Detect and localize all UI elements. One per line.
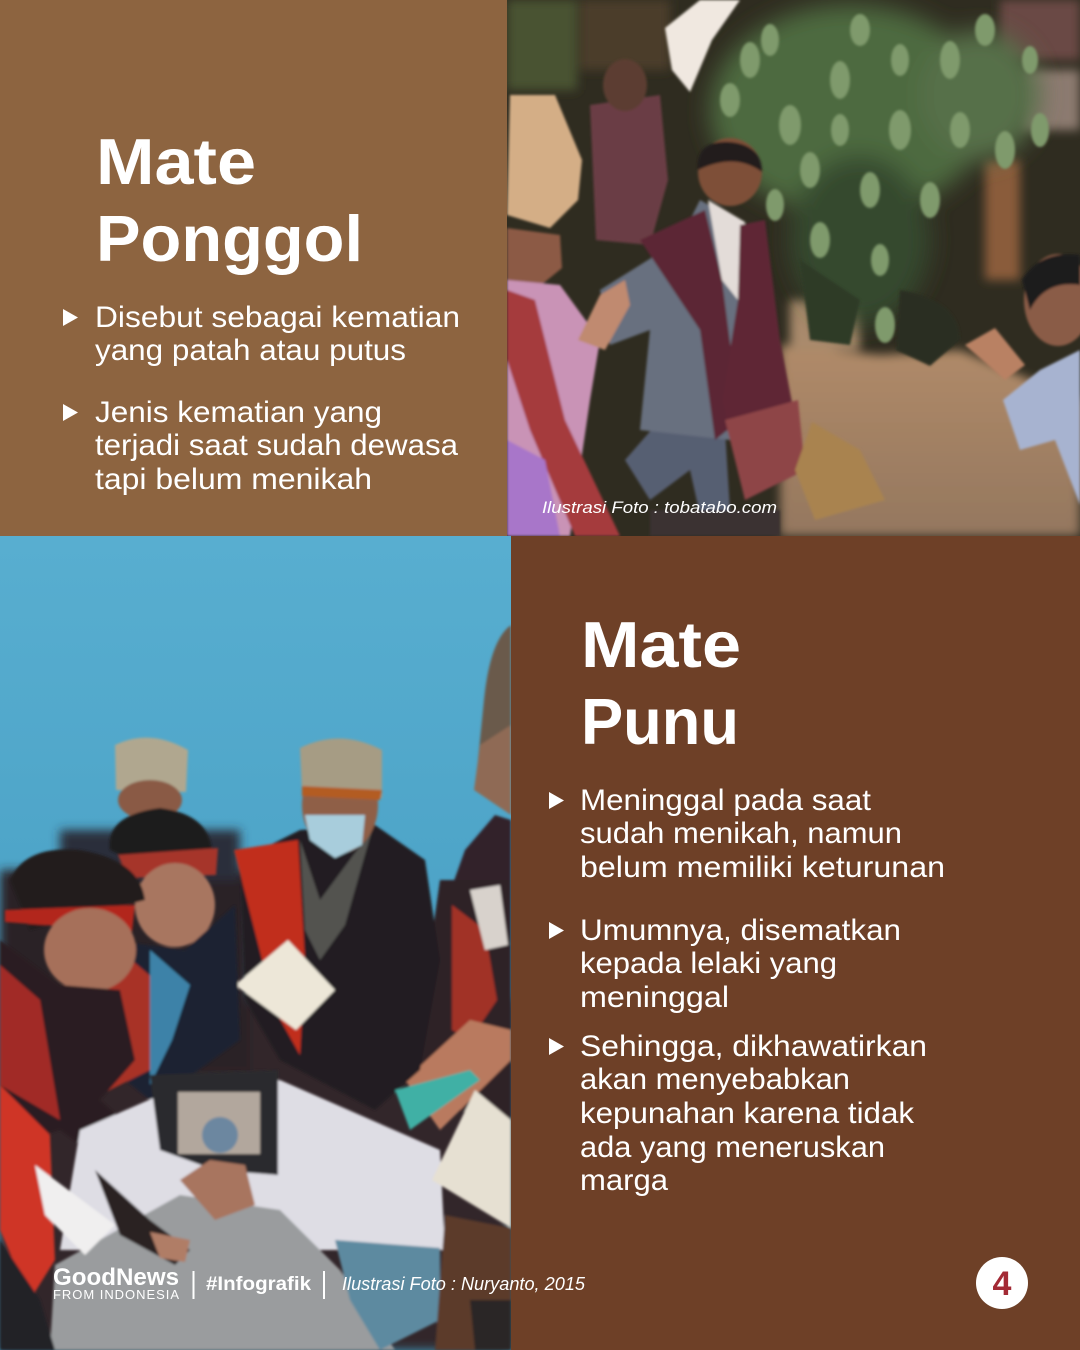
text block: Ponggol point 2: terjadi saat sudah dewasa (95, 429, 458, 462)
text block: Ponggol point 1: Disebut sebagai kematian (95, 301, 460, 334)
deceased grey ulos (50, 1195, 395, 1350)
edge figure (478, 625, 511, 810)
page number badge (976, 1257, 1028, 1309)
women (110, 808, 212, 860)
text block: Punu point 3: akan menyebabkan (580, 1063, 850, 1096)
photo credit: tobatabo: Ilustrasi Foto : tobatabo.com (542, 498, 777, 517)
text block: Ponggol point 2: Jenis kematian yang (95, 396, 382, 429)
heading: Mate Punu: Mate (581, 608, 741, 681)
foliage (710, 5, 1040, 325)
text block: Ponggol point 2 (63, 396, 458, 496)
footer: hashtag Infografik with dividers: #Infografik (206, 1274, 311, 1295)
text block: Ponggol point 1: yang patah atau putus (95, 334, 406, 367)
batik man background (590, 95, 668, 245)
heading: Mate Punu (581, 608, 741, 758)
photo: mourners around a coffin against blue wall (0, 536, 511, 1350)
man's legs and suit (624, 430, 732, 512)
text block: Punu point 1: Meninggal pada saat (580, 784, 872, 817)
back man (115, 738, 188, 792)
dark bush base (896, 290, 960, 366)
mat (795, 422, 885, 520)
text block: Ponggol point 1 (63, 301, 460, 367)
photo: Batak ceremony with man in grey suit and ulos (507, 0, 1080, 536)
heading: Mate Ponggol: Mate (96, 125, 256, 198)
man's head (698, 138, 762, 206)
panel: Mate Ponggol background (0, 0, 507, 536)
dark suited man (240, 825, 440, 1110)
footer: hashtag Infografik with dividers (192, 1271, 325, 1299)
photo credit: Nuryanto: Ilustrasi Foto : Nuryanto, 2015 (342, 1274, 586, 1294)
heading: Mate Ponggol (96, 125, 363, 275)
booklet (235, 940, 335, 1030)
text block: Punu point 2: Umumnya, disematkan (580, 914, 901, 947)
red ulos left (0, 1085, 55, 1300)
text block: Punu point 3: kepunahan karena tidak (580, 1097, 915, 1130)
woman (507, 228, 562, 286)
text block: Punu point 3 (549, 1030, 927, 1197)
white shirt (708, 200, 745, 300)
heading: Mate Punu: Punu (581, 685, 739, 758)
right man (1024, 254, 1080, 346)
footer: GoodNews logo: FROM INDONESIA (53, 1287, 179, 1302)
heading: Mate Ponggol: Ponggol (96, 202, 363, 275)
footer: GoodNews logo: GoodNews (53, 1264, 179, 1291)
text block: Punu point 3: Sehingga, dikhawatirkan (580, 1030, 927, 1063)
text block: Punu point 1: sudah menikah, namun (580, 817, 902, 850)
clay pot (507, 95, 582, 228)
maroon ulos shawl (640, 210, 740, 440)
text block: Punu point 1 (549, 784, 945, 884)
text block: Punu point 3: ada yang meneruskan (580, 1131, 885, 1164)
text block: Punu point 2: kepada lelaki yang (580, 947, 837, 980)
text block: Ponggol point 2: tapi belum menikah (95, 463, 372, 496)
panel: Mate Punu background (511, 536, 1080, 1350)
text block: Punu point 2: meninggal (580, 981, 729, 1014)
white flag (665, 0, 740, 92)
coffin (60, 1080, 445, 1250)
text block: Punu point 3: marga (580, 1164, 668, 1197)
text block: Punu point 2 (549, 914, 901, 1014)
woman's hands (578, 280, 630, 350)
text block: Punu point 1: belum memiliki keturunan (580, 851, 945, 884)
lower right items (335, 1240, 440, 1350)
page number badge: 4 (993, 1265, 1012, 1303)
